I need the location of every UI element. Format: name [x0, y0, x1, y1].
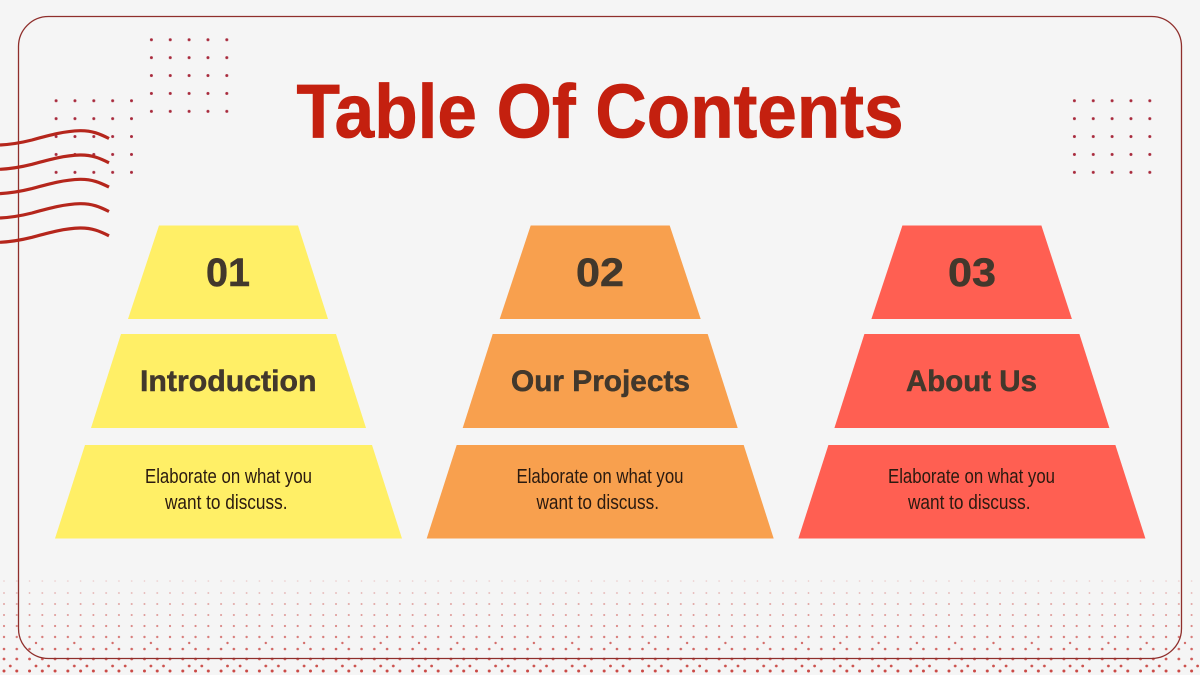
wavy lines [0, 131, 109, 242]
dot grid: top centre-left [142, 31, 236, 120]
tier: number [871, 226, 1072, 319]
tier: description: want to discuss. [164, 492, 288, 514]
dot grid: left [47, 92, 141, 181]
tier: description: want to discuss. [536, 492, 659, 514]
tier: number [500, 226, 701, 319]
tier: heading [463, 334, 738, 428]
tier: number: 03 [948, 251, 996, 295]
dot grid: right [1065, 92, 1159, 181]
tier: heading [91, 334, 366, 428]
halftone dot band [0, 578, 1200, 674]
tier: description: Elaborate on what you [516, 466, 684, 488]
tier: number: 01 [206, 251, 250, 295]
tier: number [128, 226, 328, 319]
tier: description [798, 445, 1145, 538]
tier: heading: Introduction [140, 365, 316, 398]
tier: description: Elaborate on what you [145, 466, 312, 488]
title: Table Of Contents [296, 70, 904, 154]
tier: heading: About Us [906, 365, 1037, 398]
tier: description [427, 445, 774, 538]
tier: description: Elaborate on what you [888, 466, 1055, 488]
tier: description [55, 445, 402, 538]
panel: 03 About Us [798, 226, 1145, 538]
tier: heading [834, 334, 1109, 428]
panel: 02 Our Projects [427, 226, 774, 538]
tier: heading: Our Projects [511, 365, 690, 398]
tier: number: 02 [576, 251, 624, 295]
tier: description: want to discuss. [907, 492, 1030, 514]
panel: 01 Introduction [55, 226, 402, 538]
